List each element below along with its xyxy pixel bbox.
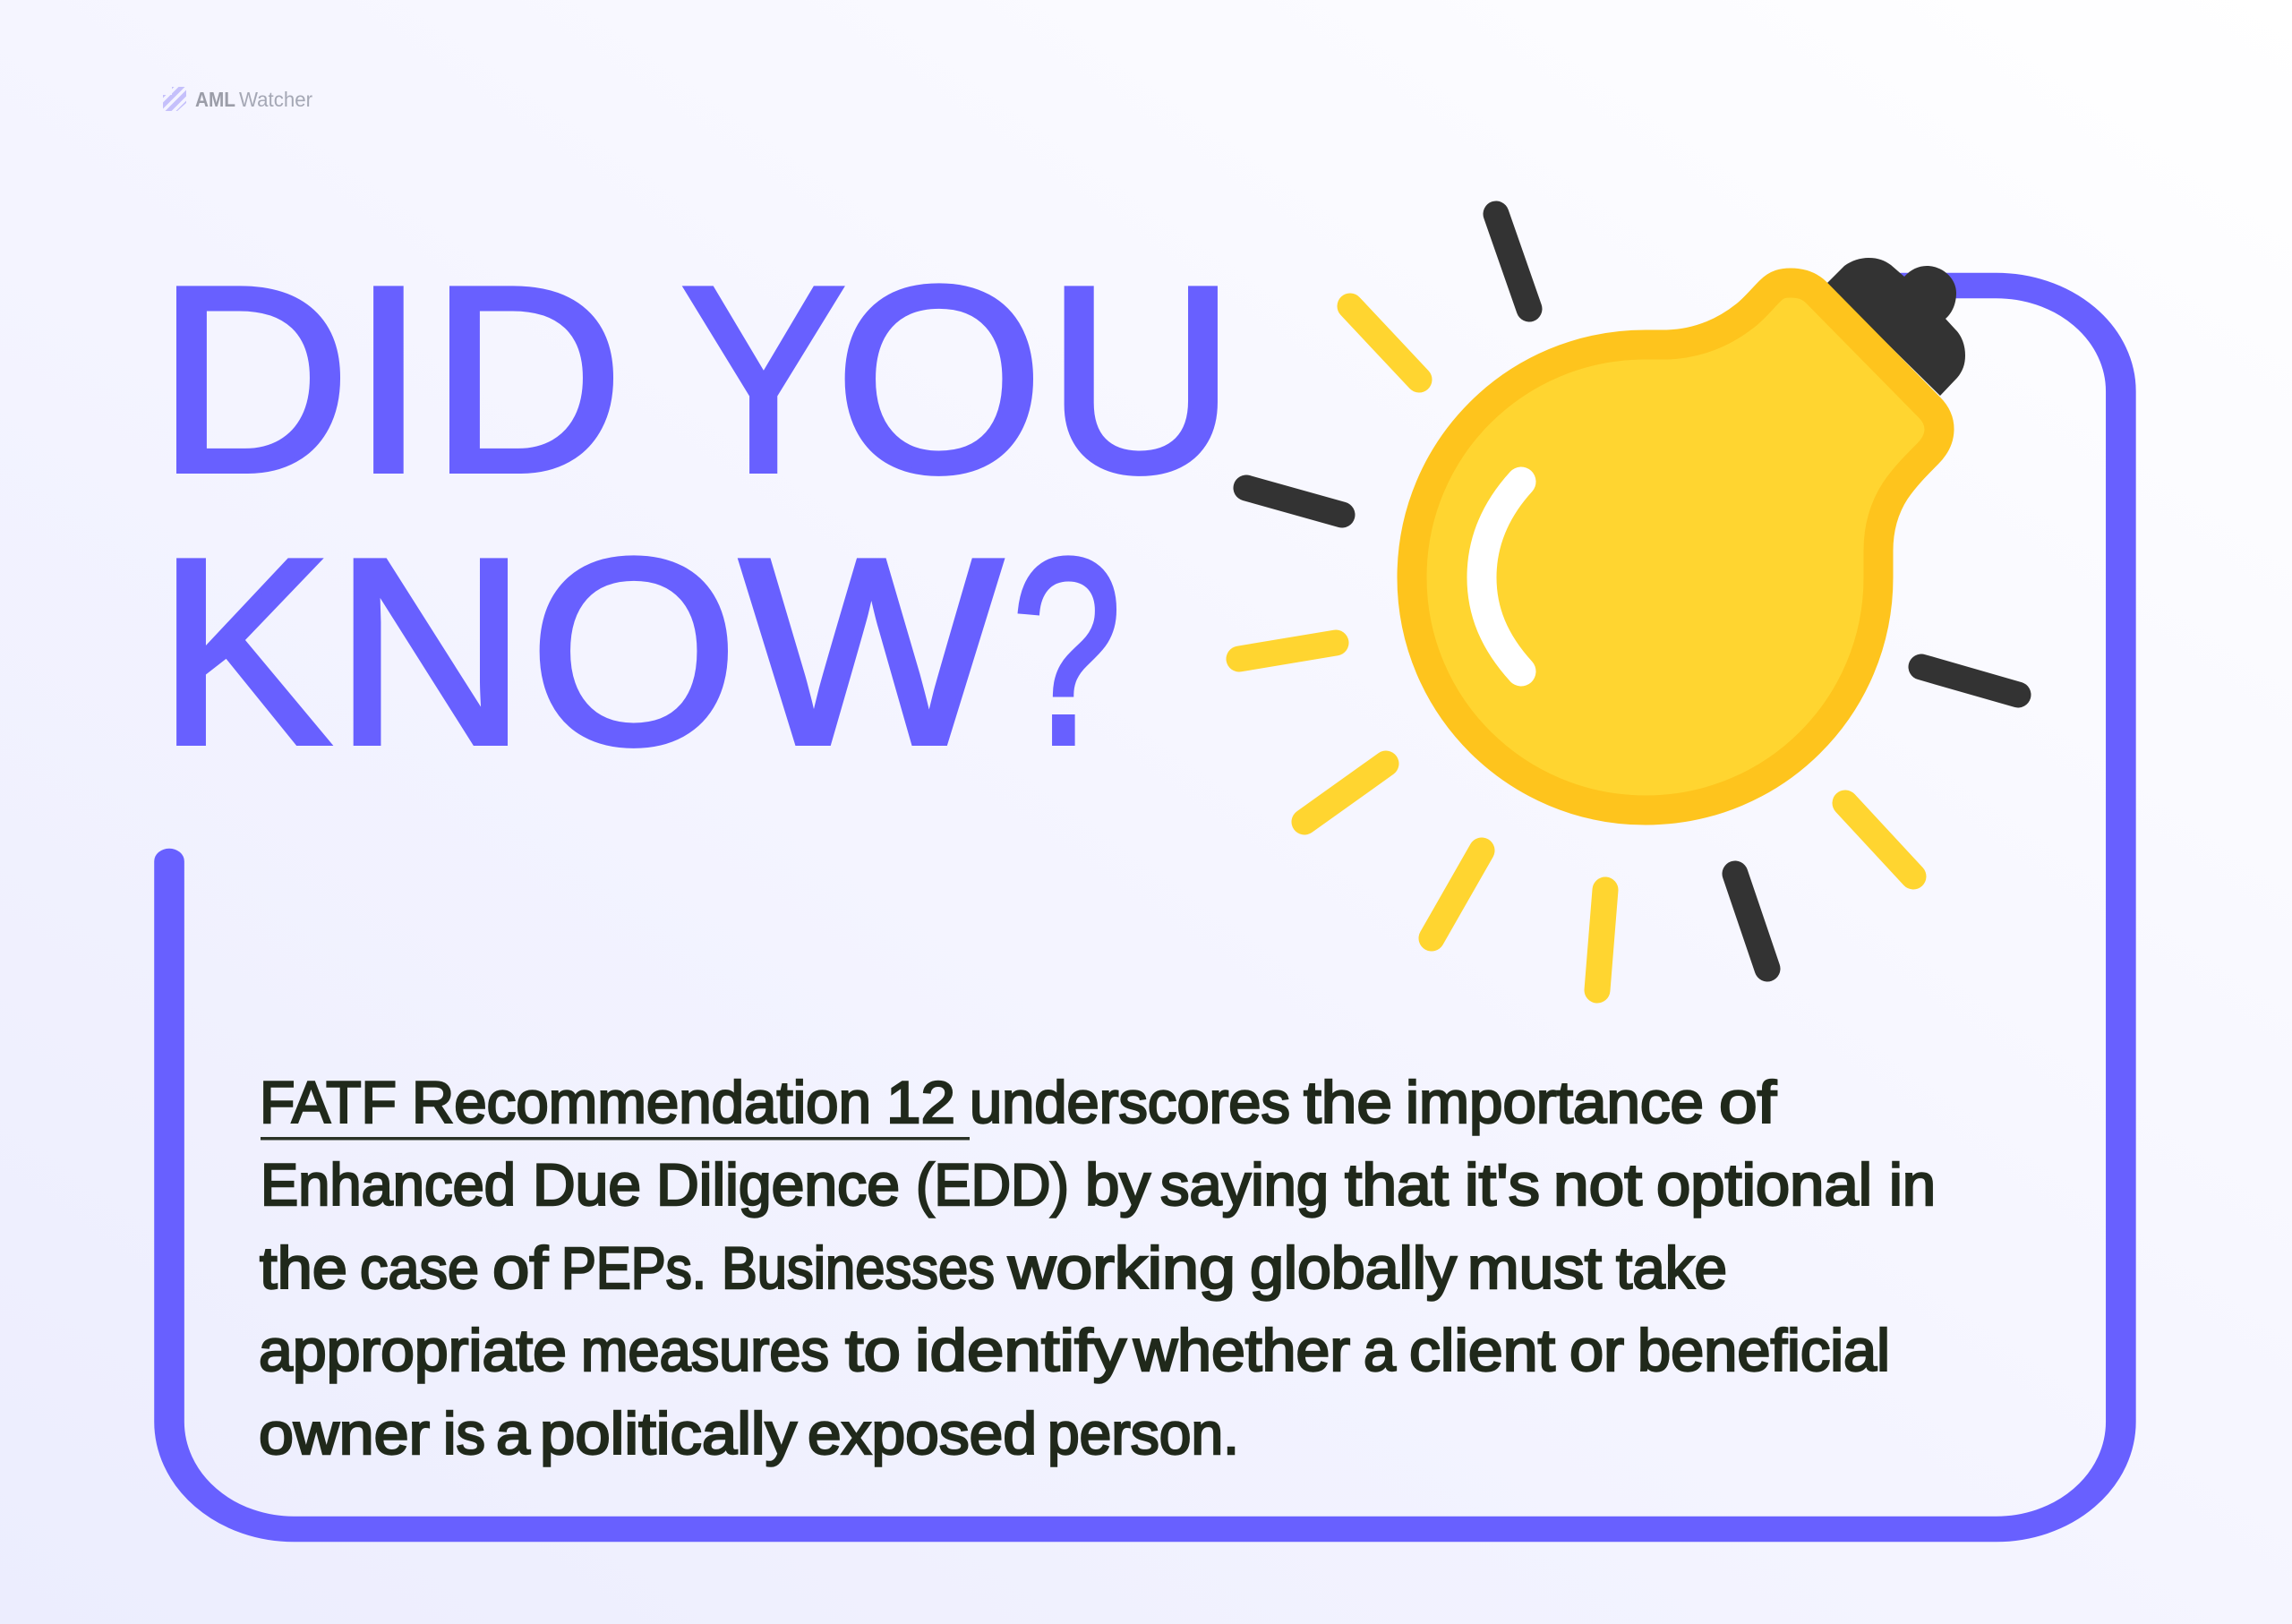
body text [259,1069,1936,1466]
ray: lower-left yellow [1304,764,1386,822]
line 3: globally [1250,1235,1457,1301]
ray: top dark [1496,214,1529,309]
ray: bottom dark [1735,874,1767,969]
logo wordmark: AML [195,88,235,111]
title line 1 [158,231,1236,527]
line 1: importance [1406,1069,1704,1135]
line 1: 12 [886,1069,955,1135]
line 4: a [1364,1317,1396,1383]
line 4: measures [581,1317,829,1383]
ray: right dark [1921,667,2018,695]
icon: light bulb [1412,258,1965,810]
underline [261,1137,970,1141]
line 3: of [492,1235,549,1301]
logo: AML Watcher [163,87,312,111]
bulb highlight [1482,482,1521,671]
line 4: client [1409,1317,1555,1383]
icon: logo stripes [163,87,186,111]
line 5: a [496,1400,530,1466]
line 5: exposed [808,1400,1037,1466]
line 2: Enhanced [261,1151,516,1218]
line 4 [259,1317,1890,1383]
bulb glass [1412,283,1939,810]
ray: lower-right yellow [1845,803,1913,876]
line 3: the [260,1235,347,1301]
ray: top-left yellow [1350,306,1419,380]
line 2: in [1889,1151,1936,1218]
title line 1: O [834,231,1043,527]
line 2: Diligence [656,1151,900,1218]
line 4: appropriate [259,1317,567,1383]
line 1 [260,1069,1777,1135]
line 4: identify [915,1317,1126,1383]
light rays [1239,214,2018,990]
title line 2: N [334,503,526,799]
line 2: saying [1160,1151,1329,1218]
line 2: that [1345,1151,1449,1218]
line 4: or [1569,1317,1624,1383]
line 1: FATF [260,1069,397,1135]
ray: bottom-left yellow [1432,850,1482,938]
line 4: whether [1133,1317,1350,1383]
ray: left yellow [1239,643,1336,659]
title line 2: W [740,503,1005,799]
title line 1: I [352,231,425,527]
line 2 [261,1151,1936,1218]
line 4: beneficial [1638,1317,1890,1383]
line 5: politically [540,1400,797,1466]
title line 1: Y [681,231,846,527]
line 2: (EDD) [916,1151,1069,1218]
line 3: Businesses [722,1235,995,1301]
logo wordmark second word: Watcher [239,88,312,111]
title line 2: K [158,503,330,799]
line 1: the [1304,1069,1392,1135]
title line 1: D [158,231,350,527]
line 1: of [1719,1069,1777,1135]
title line 2: ? [1012,503,1122,799]
line 5: is [443,1400,485,1466]
line 3: case [360,1235,479,1301]
line 3: must [1467,1235,1602,1301]
line 2: Due [533,1151,641,1218]
line 5: owner [259,1400,430,1466]
line 2: by [1085,1151,1150,1218]
bulb cap [1826,258,1965,396]
title line 1: U [1047,231,1236,527]
line 1: underscores [970,1069,1290,1135]
line 4: to [845,1317,901,1383]
line 3 [260,1235,1727,1301]
line 3: take [1616,1235,1727,1301]
line 3: PEPs. [561,1235,706,1301]
line 2: it's [1465,1151,1540,1218]
line 2: not [1553,1151,1642,1218]
line 5: person. [1048,1400,1239,1466]
title line 1: D [430,231,623,527]
line 1: Recommendation [412,1069,871,1135]
ray: bottom yellow [1597,890,1605,990]
title line 2 [158,503,1122,799]
title: DID YOU KNOW? [158,231,1236,799]
frame border [169,286,2121,1529]
ray: left dark [1246,488,1342,515]
line 5 [259,1400,1239,1466]
title line 2: O [530,503,738,799]
line 2: optional [1656,1151,1872,1218]
line 3: working [1007,1235,1236,1301]
